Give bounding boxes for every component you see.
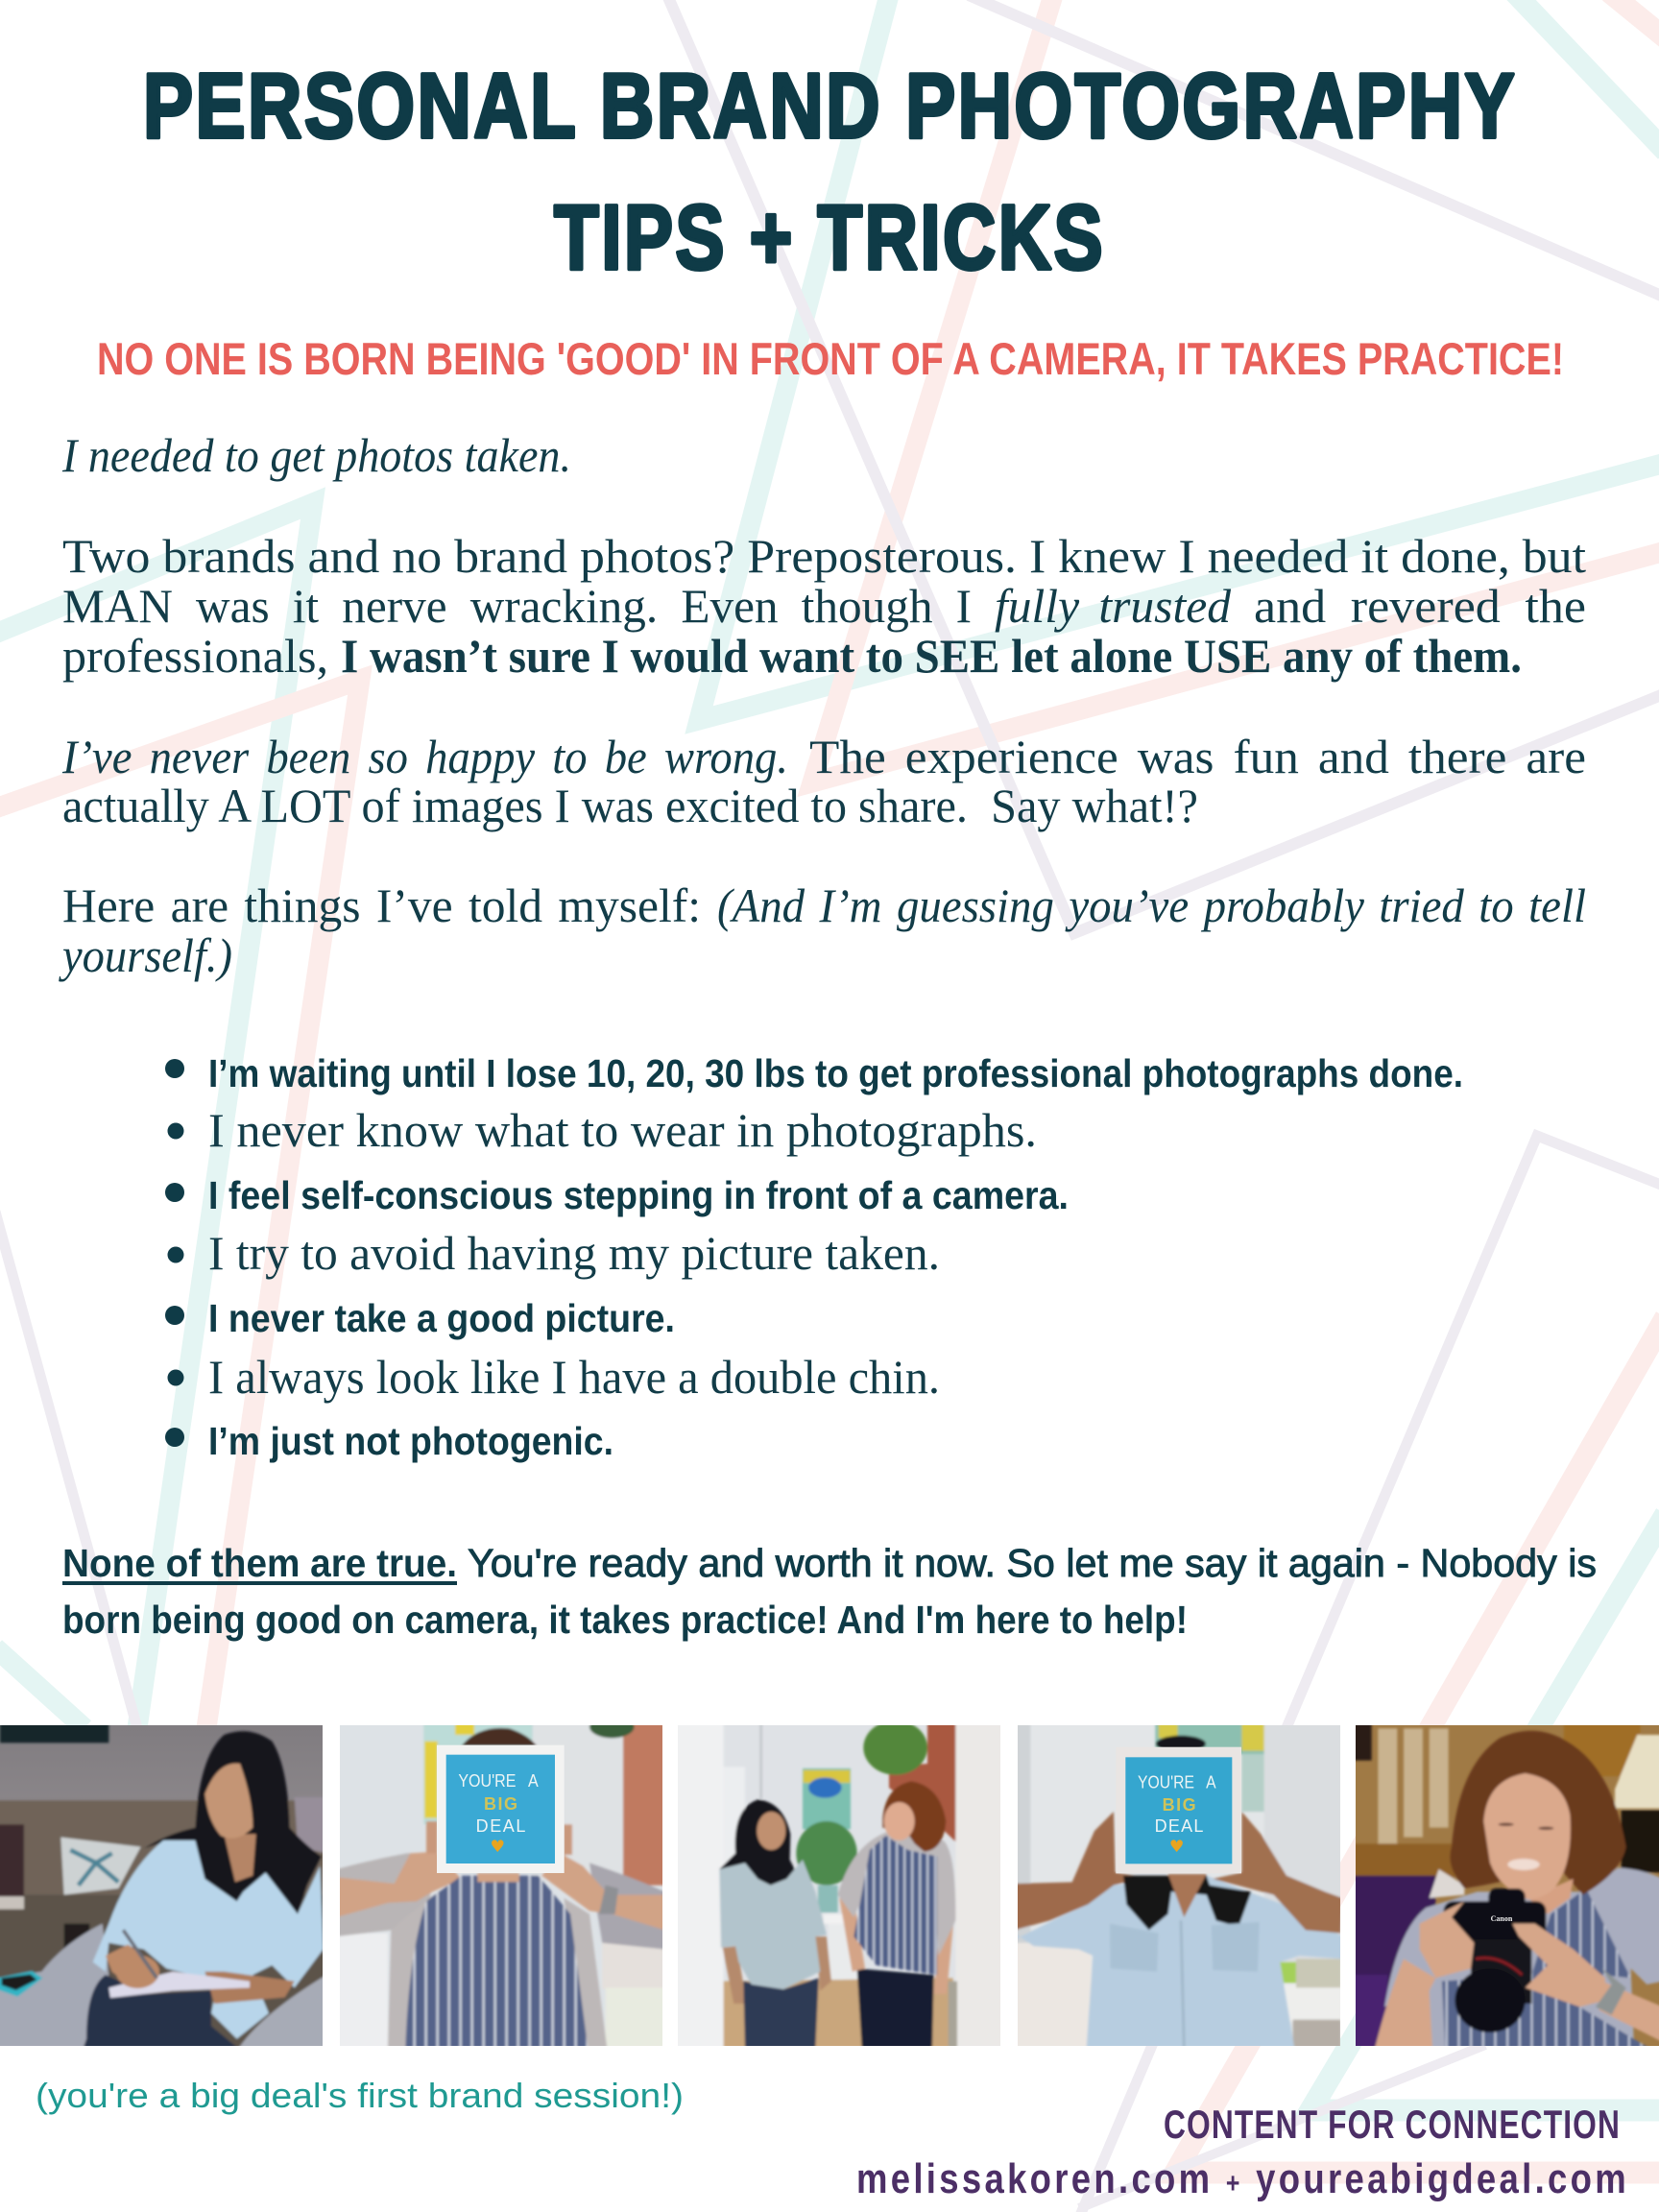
title (143, 55, 1517, 289)
camera brand: Canon (1491, 1914, 1513, 1923)
paragraph: happy to be wrong (61, 730, 1586, 832)
paragraph: things I've told myself (58, 878, 1586, 982)
photo 1: woman writing in notebook (0, 1725, 323, 2046)
paragraph: two brands: MAN was it nerve wracking. Even though I (62, 579, 972, 633)
closing statement: born being good on camera, it takes practice! And I'm here to help! (62, 1598, 1188, 1642)
letter board: DEAL (1155, 1816, 1203, 1836)
bullet 2: I never know what to wear in photographs. (208, 1103, 1037, 1157)
photo 4: woman holding letter board, denim shirt (1018, 1725, 1340, 2046)
bullet list (165, 1051, 1463, 1463)
paragraph: two brands (62, 529, 1586, 683)
closing statement: None of them are true. (62, 1541, 457, 1585)
title: TIPS + TRICKS (554, 186, 1105, 289)
letter board: ♥ (1169, 1838, 1184, 1857)
paragraph: happy to be wrong: actually A LOT of images I was excited to share. Say what!? (62, 779, 1198, 832)
paragraph: two brands: I wasn’t sure I would want to SEE let alone USE any of them. (341, 629, 1522, 683)
letter board: YOU'RE A (1138, 1773, 1216, 1792)
bullet 3: I feel self-conscious stepping in front of a camera. (208, 1173, 1069, 1217)
intro line: I needed to get photos taken. (61, 428, 571, 482)
closing statement: You're ready and worth it now. So let me say it again - Nobody is (468, 1541, 1597, 1585)
letter board: ♥ (491, 1838, 505, 1857)
bullet 4: I try to avoid having my picture taken. (208, 1226, 940, 1280)
bullet 5: I never take a good picture. (208, 1296, 675, 1340)
closing statement (62, 1541, 1597, 1642)
letter board (437, 1745, 565, 1873)
paragraph: things I've told myself: yourself.) (58, 928, 232, 982)
paragraph: two brands: professionals, (62, 629, 328, 683)
photo 3: two women standing and laughing (678, 1725, 1000, 2046)
photo 5: woman with camera (1356, 1725, 1659, 2046)
paragraph: happy to be wrong: The experience was fun and there are (809, 730, 1586, 783)
letter board: BIG (484, 1794, 517, 1814)
photo 2: woman holding letter board, striped top (340, 1725, 662, 2046)
letter board: YOU'RE A (458, 1771, 539, 1791)
bullet 1: I’m waiting until I lose 10, 20, 30 lbs to get professional photographs done. (208, 1051, 1463, 1095)
letter board: DEAL (476, 1816, 525, 1836)
paragraph: happy to be wrong: I’ve never been so happy to be wrong. (61, 730, 788, 783)
paragraph: things I've told myself: (And I’m guessing you’ve probably tried to tell (717, 878, 1586, 932)
bullet 7: I’m just not photogenic. (208, 1419, 613, 1463)
paragraph: two brands: and revered the (1254, 579, 1586, 633)
caption: (you're a big deal's first brand session!) (36, 2076, 684, 2115)
letter board (1116, 1747, 1241, 1873)
bullet 6: I always look like I have a double chin. (208, 1350, 940, 1404)
paragraph: things I've told myself: Here are things I’ve told myself: (62, 878, 701, 932)
letter board: BIG (1163, 1795, 1196, 1815)
paragraph: two brands: Two brands and no brand photos? Preposterous. I knew I needed it done, but (62, 529, 1586, 583)
paragraph: two brands: fully trusted (995, 579, 1232, 633)
